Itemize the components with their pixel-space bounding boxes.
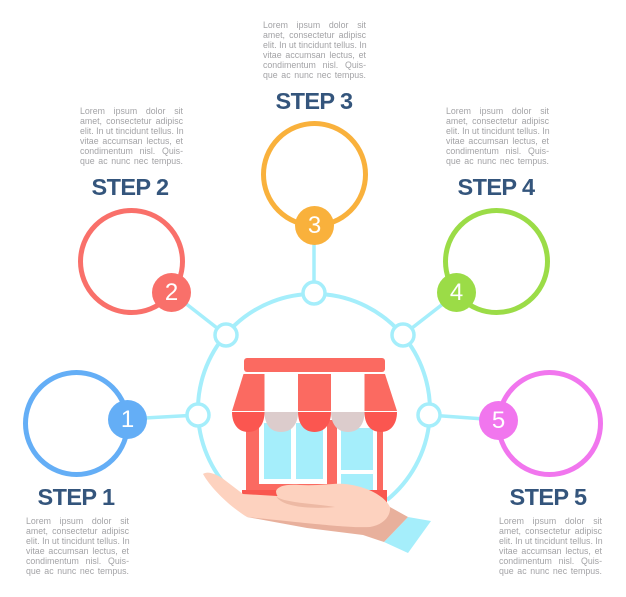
text block 1: amet, consectetur adipisc: [26, 526, 129, 536]
text block 2: [80, 106, 184, 166]
heading: step 4: STEP 4: [458, 174, 534, 200]
text block 5: vitae accumsan lectus, et: [499, 546, 602, 556]
text block 1: Lorem ipsum dolor sit: [26, 516, 129, 526]
badge 2: 2: [165, 279, 178, 306]
text block 1: condimentum nisl. Quis-: [26, 556, 129, 566]
badge 3: 3: [308, 212, 321, 239]
connector lines: [127, 226, 498, 420]
text block 4: elit. In ut tincidunt tellus. In: [446, 126, 550, 136]
text block 3: condimentum nisl. Quis-: [263, 60, 366, 70]
badge 3: [295, 206, 334, 245]
text block 5: amet, consectetur adipisc: [499, 526, 602, 536]
text block 1: vitae accumsan lectus, et: [26, 546, 129, 556]
text block 4: [446, 106, 550, 166]
badge 1: 1: [121, 406, 134, 433]
circle 1: [23, 370, 130, 477]
heading: step 5: STEP 5: [510, 484, 586, 510]
text block 4: condimentum nisl. Quis-: [446, 146, 549, 156]
text block 3: Lorem ipsum dolor sit: [263, 20, 366, 30]
panel: step 2: [78, 106, 191, 315]
badge 4: [437, 273, 476, 312]
text block 1: [26, 516, 130, 576]
heading: step 1: STEP 1: [38, 484, 114, 510]
text block 2: condimentum nisl. Quis-: [80, 146, 183, 156]
badge 4: 4: [450, 279, 463, 306]
text block 4: amet, consectetur adipisc: [446, 116, 549, 126]
hub ring: [198, 294, 430, 500]
text block 2: amet, consectetur adipisc: [80, 116, 183, 126]
heading: step 3: STEP 3: [276, 88, 352, 114]
text block 3: elit. In ut tincidunt tellus. In: [263, 40, 367, 50]
badge 2: [152, 273, 191, 312]
icon: shop: [232, 358, 397, 503]
text block 2: elit. In ut tincidunt tellus. In: [80, 126, 184, 136]
text block 5: elit. In ut tincidunt tellus. In: [499, 536, 603, 546]
icon: hand: [203, 473, 431, 553]
badge 5: [479, 401, 518, 440]
circle 5: [496, 370, 603, 477]
hub nodes: [187, 282, 440, 426]
text block 3: amet, consectetur adipisc: [263, 30, 366, 40]
text block 1: que ac nunc nec tempus.: [26, 566, 129, 576]
circle 3: [261, 121, 368, 228]
text block 5: que ac nunc nec tempus.: [499, 566, 602, 576]
panel: step 1: [23, 370, 147, 576]
text block 3: vitae accumsan lectus, et: [263, 50, 366, 60]
badge 1: [108, 400, 147, 439]
text block 5: condimentum nisl. Quis-: [499, 556, 602, 566]
panel: step 5: [479, 370, 603, 576]
text block 2: vitae accumsan lectus, et: [80, 136, 183, 146]
text block 3: [263, 20, 367, 80]
text block 1: elit. In ut tincidunt tellus. In: [26, 536, 130, 546]
text block 4: Lorem ipsum dolor sit: [446, 106, 549, 116]
panel: step 4: [437, 106, 550, 315]
text block 2: Lorem ipsum dolor sit: [80, 106, 183, 116]
text block 3: que ac nunc nec tempus.: [263, 70, 366, 80]
circle 4: [443, 208, 550, 315]
heading: step 2: STEP 2: [92, 174, 168, 200]
text block 2: que ac nunc nec tempus.: [80, 156, 183, 166]
text block 5: [499, 516, 603, 576]
text block 4: vitae accumsan lectus, et: [446, 136, 549, 146]
badge 5: 5: [492, 407, 505, 434]
text block 4: que ac nunc nec tempus.: [446, 156, 549, 166]
text block 5: Lorem ipsum dolor sit: [499, 516, 602, 526]
circle 2: [78, 208, 185, 315]
panel: step 3: [261, 20, 368, 245]
